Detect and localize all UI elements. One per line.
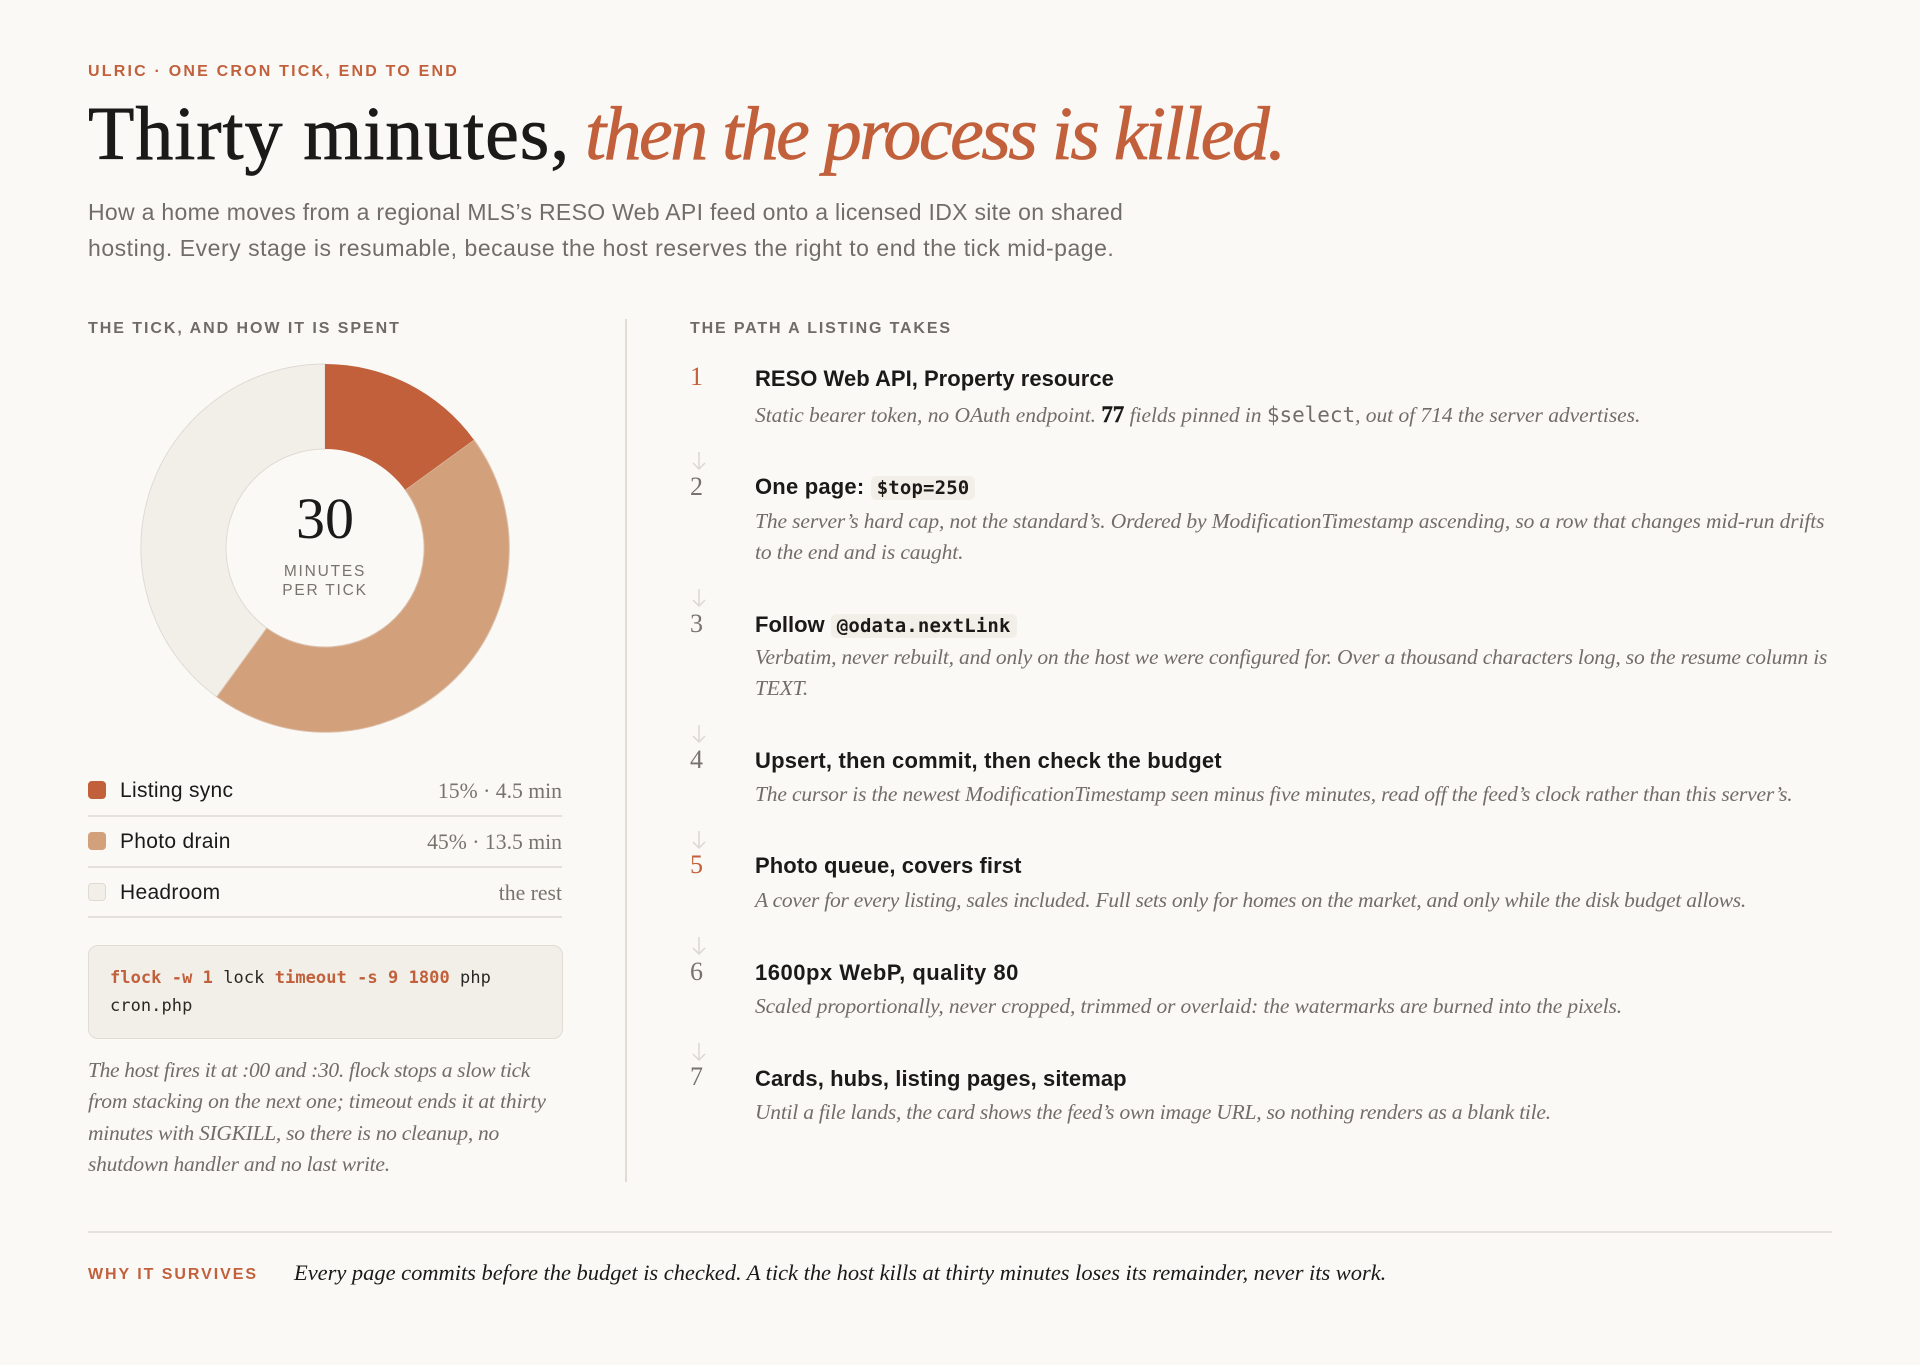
note under code: shutdown handler and no last write. xyxy=(88,1152,390,1176)
step 3 description xyxy=(755,645,1827,700)
legend label: listing sync: Listing sync xyxy=(120,778,233,802)
legend value: listing sync: 15% · 4.5 min xyxy=(438,778,562,802)
step 2 description: to the end and is caught. xyxy=(755,540,963,564)
step 5 number: 5 xyxy=(690,850,703,879)
step 3 number: 3 xyxy=(690,609,703,638)
segment: headroom xyxy=(141,364,325,697)
step 3 description: TEXT. xyxy=(755,676,808,700)
arrow 2 to 3 xyxy=(692,589,706,607)
subtitle: How a home moves from a regional MLS’s RESO Web API feed onto a licensed IDX site on shared xyxy=(88,199,1123,225)
legend value: headroom: the rest xyxy=(499,880,562,904)
step 6 number: 6 xyxy=(690,957,703,986)
step 4 description: The cursor is the newest ModificationTimestamp seen minus five minutes, read off the feed’s clock rather than this server’s. xyxy=(755,782,1792,806)
note under code: from stacking on the next one; timeout ends it at thirty xyxy=(88,1089,546,1113)
legend swatch: photo drain xyxy=(88,832,106,850)
arrow 3 to 4 xyxy=(692,725,706,743)
step 6 description: Scaled proportionally, never cropped, trimmed or overlaid: the watermarks are burned into the pixels. xyxy=(755,994,1622,1018)
step 4 title: Upsert, then commit, then check the budget xyxy=(755,748,1222,773)
step 3 xyxy=(690,609,1827,700)
step 1 number: 1 xyxy=(690,362,703,391)
legend swatch: headroom xyxy=(88,883,106,901)
step 7 xyxy=(690,1062,1551,1124)
code block: cron command: cron.php xyxy=(110,996,192,1016)
step 5 xyxy=(690,850,1746,912)
step 2 description: The server’s hard cap, not the standard’s. Ordered by ModificationTimestamp ascending, so a row that changes mid-run drifts xyxy=(755,509,1824,533)
legend swatch: listing sync xyxy=(88,781,106,799)
legend xyxy=(88,778,562,918)
right column heading: THE PATH A LISTING TAKES xyxy=(690,320,952,337)
donut centre label: PER TICK xyxy=(282,582,368,599)
footer label: WHY IT SURVIVES xyxy=(88,1266,258,1283)
legend label: photo drain: Photo drain xyxy=(120,830,231,852)
step 4 xyxy=(690,745,1792,806)
title: Thirty minutes, then the process is killed. xyxy=(88,92,1284,176)
legend value: photo drain: 45% · 13.5 min xyxy=(427,830,562,854)
donut centre label: MINUTES xyxy=(284,563,366,580)
footer statement: Every page commits before the budget is checked. A tick the host kills at thirty minutes loses its remainder, never its work. xyxy=(294,1260,1386,1285)
step 2 number: 2 xyxy=(690,472,703,501)
left column heading: THE TICK, AND HOW IT IS SPENT xyxy=(88,320,401,337)
code block: cron command xyxy=(88,945,563,1039)
step 3 title: Follow @odata.nextLink xyxy=(755,612,1011,637)
step 1 xyxy=(690,362,1640,427)
subtitle xyxy=(88,199,1123,261)
arrow 1 to 2 xyxy=(692,452,706,470)
step 6 title: 1600px WebP, quality 80 xyxy=(755,960,1019,985)
step 6 xyxy=(690,957,1622,1018)
footer rule xyxy=(88,1231,1832,1233)
step 5 description: A cover for every listing, sales included. Full sets only for homes on the market, and only while the disk budget allows. xyxy=(755,888,1746,912)
segment: photo drain xyxy=(217,440,509,732)
donut centre label xyxy=(282,563,368,599)
arrow 6 to 7 xyxy=(692,1043,706,1061)
step 4 number: 4 xyxy=(690,745,703,774)
step 2 title: One page: $top=250 xyxy=(755,474,969,499)
vertical divider xyxy=(625,319,627,1182)
note under code xyxy=(88,1058,546,1176)
note under code: The host fires it at :00 and :30. flock stops a slow tick xyxy=(88,1058,530,1082)
subtitle: hosting. Every stage is resumable, because the host reserves the right to end the tick mid-page. xyxy=(88,234,1114,260)
step 7 description: Until a file lands, the card shows the feed’s own image URL, so nothing renders as a blank tile. xyxy=(755,1100,1551,1124)
donut centre value: 30 xyxy=(296,486,354,551)
eyebrow: ULRIC · ONE CRON TICK, END TO END xyxy=(88,63,459,80)
step 7 title: Cards, hubs, listing pages, sitemap xyxy=(755,1066,1127,1091)
step 5 title: Photo queue, covers first xyxy=(755,853,1022,878)
step 7 number: 7 xyxy=(690,1062,703,1091)
segment: listing sync xyxy=(325,364,474,490)
arrow 4 to 5 xyxy=(692,831,706,849)
step 2 xyxy=(690,472,1824,564)
note under code: minutes with SIGKILL, so there is no cleanup, no xyxy=(88,1121,499,1145)
step 3 description: Verbatim, never rebuilt, and only on the host we were configured for. Over a thousand characters long, so the resume column is xyxy=(755,645,1827,669)
code block: cron command: flock -w 1 lock timeout -s 9 1800 php xyxy=(110,968,491,988)
donut chart xyxy=(140,364,510,733)
step 2 description xyxy=(755,509,1824,564)
arrow 5 to 6 xyxy=(692,937,706,955)
step 1 description: Static bearer token, no OAuth endpoint. 77 fields pinned in $select, out of 714 the server advertises. xyxy=(755,402,1640,427)
step 1 title: RESO Web API, Property resource xyxy=(755,366,1114,391)
legend label: headroom: Headroom xyxy=(120,880,220,904)
